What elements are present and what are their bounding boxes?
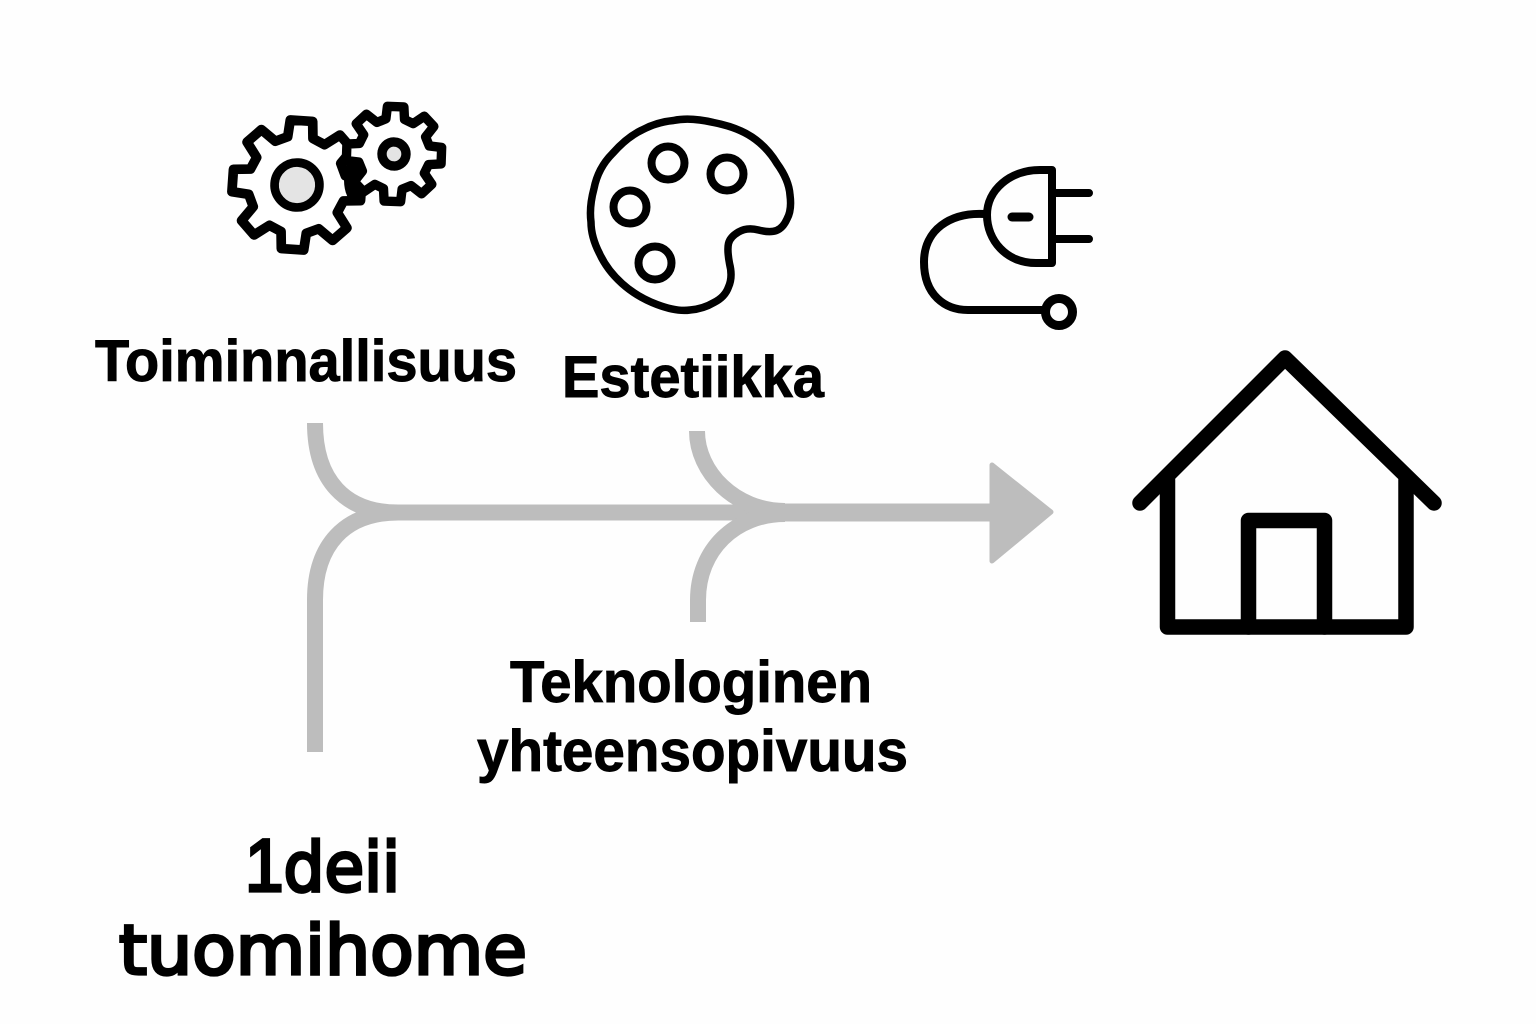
icon: house <box>1140 358 1434 627</box>
title: 1deii tuomihome: tuomihome <box>119 911 527 991</box>
title: 1deii tuomihome <box>119 824 527 991</box>
flow arrow <box>315 423 1051 752</box>
icon: plug <box>924 170 1089 326</box>
branch: technology <box>698 514 785 622</box>
plug prongs <box>1054 193 1089 239</box>
icon: gears <box>228 105 443 254</box>
icon: palette <box>590 119 791 310</box>
label: Teknologinen yhteensopivuus: Teknologinen <box>510 650 872 715</box>
palette outline <box>590 119 791 310</box>
plug body <box>987 170 1052 263</box>
arrow head <box>992 465 1051 561</box>
main shaft, last segment <box>780 504 992 522</box>
title: 1deii tuomihome: 1deii <box>245 824 400 908</box>
label: Teknologinen yhteensopivuus: yhteensopivuus <box>477 719 908 784</box>
label: Teknologinen yhteensopivuus <box>477 650 908 784</box>
branch: functionality <box>315 423 398 512</box>
small gear <box>345 105 443 203</box>
paint wells <box>614 146 744 280</box>
walls <box>1168 480 1406 627</box>
gear contact joint <box>344 157 366 203</box>
roof <box>1140 358 1434 503</box>
branch: idea trunk <box>315 512 398 752</box>
door <box>1248 520 1324 627</box>
minus mark <box>1012 212 1029 222</box>
branch: aesthetics <box>697 431 785 511</box>
main shaft, first segment <box>395 504 785 520</box>
label: Estetiikka: Estetiikka <box>562 345 825 410</box>
large gear <box>228 116 366 254</box>
cord ring <box>1046 298 1072 326</box>
label: Toiminnallisuus: Toiminnallisuus <box>95 329 517 394</box>
cord <box>924 214 1045 310</box>
